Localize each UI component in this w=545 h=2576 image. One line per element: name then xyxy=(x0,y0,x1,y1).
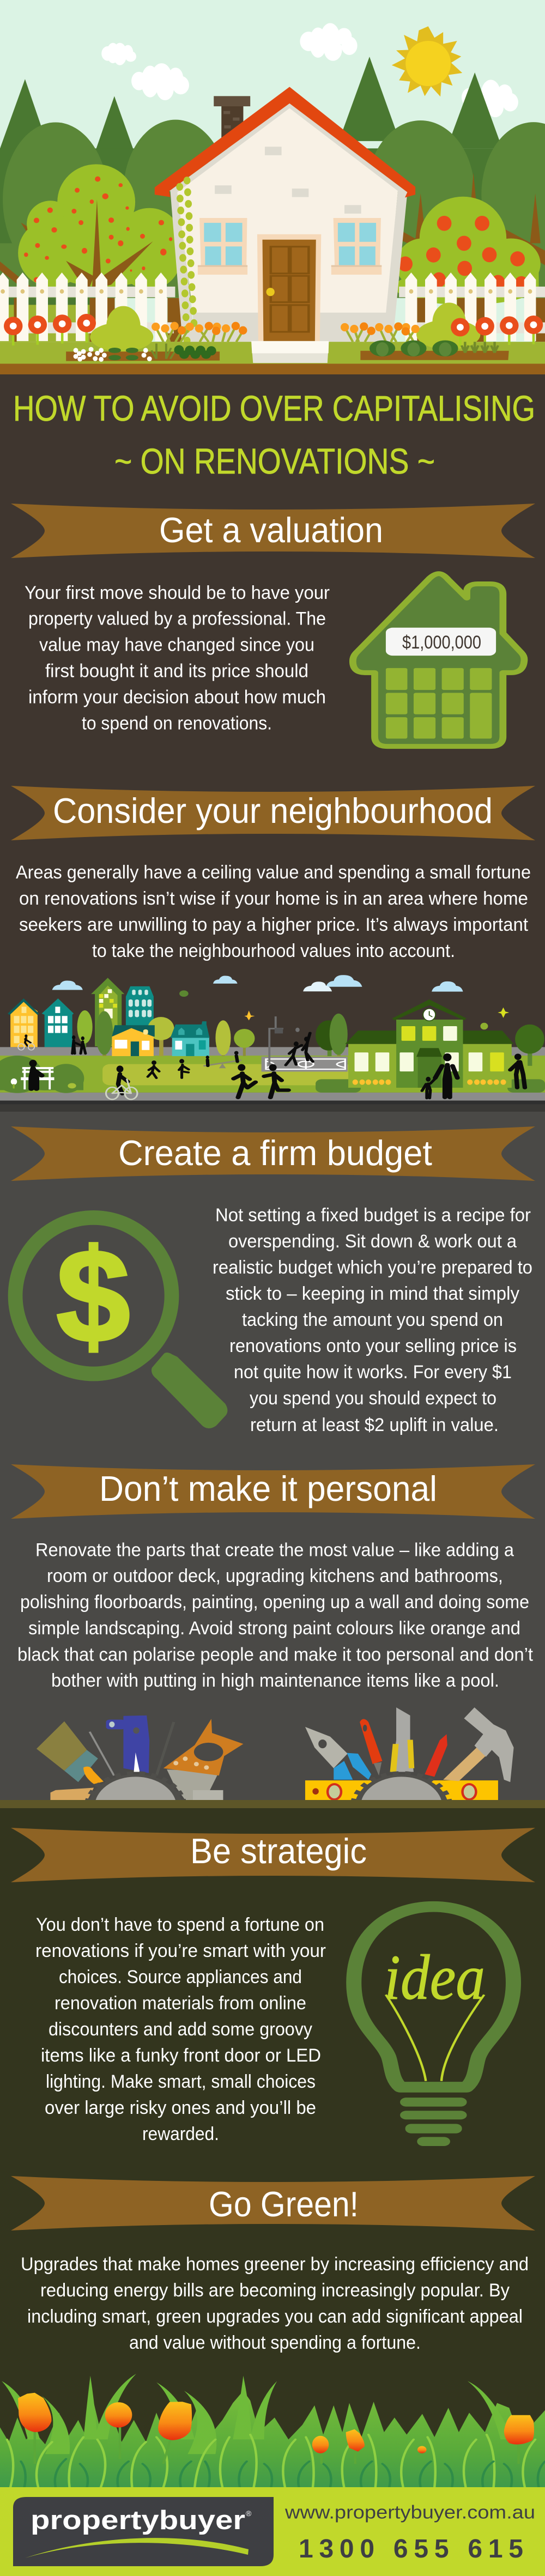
trees by school xyxy=(316,1014,544,1066)
lawn strip xyxy=(0,1056,545,1093)
panel: footer xyxy=(0,2487,545,2576)
text block: get a valuation: Your first move should be to have your xyxy=(25,583,330,603)
clouds xyxy=(52,975,463,992)
icon: green house with price tag: $1,000,000 xyxy=(402,632,481,653)
background pine trees xyxy=(0,57,545,298)
red screwdriver xyxy=(360,1719,383,1775)
park bench xyxy=(21,1067,54,1089)
banner: don't make it personal xyxy=(11,1464,535,1519)
street trees left xyxy=(77,1010,174,1056)
text block: be strategic: renovation materials from online xyxy=(55,1993,306,2014)
illustration: grass and tulips xyxy=(0,2374,545,2487)
circular saw blade xyxy=(89,1774,183,1840)
picket fence right xyxy=(399,272,545,341)
text block: don't make it personal: bother with putting in high maintenance items like a pool. xyxy=(51,1670,499,1691)
text block: be strategic: discounters and add some groovy xyxy=(49,2019,312,2040)
icon: clouds xyxy=(101,23,518,117)
icon: magnifying glass with dollar sign: $ xyxy=(56,1222,130,1370)
lawn xyxy=(0,342,545,364)
paint brush xyxy=(37,1722,104,1784)
banner: don't make it personal: Don’t make it personal xyxy=(99,1469,437,1508)
banner: go green: Go Green! xyxy=(209,2184,359,2224)
panel: get a valuation section xyxy=(0,374,545,1112)
yellow cottage xyxy=(112,1025,155,1056)
utility knife xyxy=(390,1707,414,1772)
text block: go green: reducing energy bills are becoming increasingly popular. By xyxy=(40,2280,510,2301)
basketball players xyxy=(286,1033,313,1065)
cyclist small xyxy=(18,1034,34,1050)
teal cottage xyxy=(171,1021,210,1056)
background round trees xyxy=(0,120,545,298)
text block: get a valuation xyxy=(25,583,330,734)
children running xyxy=(148,1059,189,1078)
banner: be strategic: Be strategic xyxy=(190,1831,367,1871)
green tower xyxy=(91,978,124,1046)
front door xyxy=(257,234,321,342)
gardener xyxy=(510,1053,525,1088)
grass mass xyxy=(0,2391,545,2487)
parent and child xyxy=(422,1053,457,1098)
banner: consider your neighbourhood xyxy=(11,786,535,840)
panel: create a firm budget and personal section xyxy=(0,1112,545,1840)
text block: consider your neighbourhood: on renovations isn’t wise if your home is in an area where home xyxy=(19,888,528,909)
screwdriver xyxy=(156,1722,174,1775)
hand saw xyxy=(164,1719,243,1801)
text block: create a firm budget: return at least $2 uplift in value. xyxy=(250,1415,499,1435)
text block: be strategic: You don’t have to spend a fortune on xyxy=(36,1914,324,1935)
runners xyxy=(234,1064,288,1098)
seesaw xyxy=(204,1051,240,1068)
couple walking xyxy=(72,1035,86,1053)
orange tulips xyxy=(152,322,420,342)
text block: don't make it personal: Renovate the parts that create the most value – like adding a xyxy=(35,1540,514,1561)
text block: be strategic: renovations if you’re smart with your xyxy=(35,1941,326,1961)
text block: create a firm budget: realistic budget which you’re prepared to xyxy=(213,1257,532,1278)
blue rivet tool xyxy=(106,1716,149,1773)
text block: go green: and value without spending a fortune. xyxy=(129,2332,421,2353)
red pencil xyxy=(425,1734,447,1777)
spirit level xyxy=(305,1780,498,1801)
text block: be strategic: choices. Source appliances and xyxy=(59,1967,302,1987)
circular saw blade xyxy=(355,1774,449,1840)
teal townhouse xyxy=(42,998,74,1047)
text block: create a firm budget: stick to – keeping in mind that simply xyxy=(226,1283,519,1304)
icon: idea light bulb: idea xyxy=(384,1942,485,2013)
banner: be strategic xyxy=(11,1828,535,1882)
panel: be strategic and go green section xyxy=(0,1800,545,2487)
climbing vine xyxy=(176,177,197,344)
text block: consider your neighbourhood xyxy=(16,862,531,961)
text block: create a firm budget: renovations onto your selling price is xyxy=(229,1336,517,1356)
tulips xyxy=(18,2393,534,2453)
icon: idea light bulb xyxy=(354,1907,513,2146)
icon: sun xyxy=(392,26,462,96)
text block: don't make it personal xyxy=(17,1540,534,1691)
text block: don't make it personal: simple landscaping. Avoid strong paint colours like orange and xyxy=(28,1618,520,1639)
text block: create a firm budget xyxy=(213,1205,532,1435)
banner: get a valuation: Get a valuation xyxy=(159,510,383,550)
text block: be strategic: rewarded. xyxy=(142,2124,219,2144)
illustration: neighbourhood street scene xyxy=(0,975,545,1112)
website: www.propertybuyer.com.au xyxy=(284,2502,535,2523)
school hedge xyxy=(316,1079,545,1093)
text block: consider your neighbourhood: seekers are unwilling to pay a higher price. It’s always important xyxy=(19,914,529,935)
front step xyxy=(251,341,329,363)
teal tower xyxy=(126,986,154,1026)
right window xyxy=(331,218,382,275)
text block: create a firm budget: Not setting a fixed budget is a recipe for xyxy=(215,1205,531,1226)
lighter blades xyxy=(7,2435,535,2487)
street trees middle xyxy=(215,1020,255,1056)
yellow townhouse xyxy=(8,998,39,1047)
text block: don't make it personal: polishing floorboards, painting, opening up a wall and doing some xyxy=(20,1592,529,1613)
school building xyxy=(345,999,514,1088)
banner: create a firm budget xyxy=(11,1126,535,1181)
bushes xyxy=(90,302,480,351)
text block: create a firm budget: not quite how it works. For every $1 xyxy=(234,1362,512,1383)
text block: be strategic: over large risky ones and you’ll be xyxy=(45,2098,316,2118)
text block: be strategic: items like a funky front door or LED xyxy=(41,2045,321,2066)
roof xyxy=(155,87,415,198)
wood mallet piece xyxy=(50,1787,94,1801)
steel square xyxy=(193,1790,223,1801)
area behind the fence xyxy=(0,298,545,342)
logo: propertybuyer xyxy=(13,2497,274,2566)
text block: get a valuation: property valued by a professional. The xyxy=(28,608,326,629)
silhouettes: people xyxy=(18,1033,525,1099)
red flowers xyxy=(4,314,543,347)
title: ~ ON RENOVATIONS ~ xyxy=(114,441,435,481)
text block: go green: including smart, green upgrades you can add significant appeal xyxy=(27,2306,523,2327)
banner: consider your neighbourhood: Consider your neighbourhood xyxy=(53,791,493,831)
text block: be strategic xyxy=(35,1914,326,2144)
seated person on bench xyxy=(29,1060,42,1089)
text block: get a valuation: value may have changed since you xyxy=(39,634,314,655)
hammer xyxy=(443,1707,514,1782)
vegetable bed left xyxy=(66,343,220,362)
illustration: right tool set xyxy=(305,1707,514,1840)
text block: get a valuation: to spend on renovations. xyxy=(82,713,272,734)
vegetable bed right xyxy=(360,341,509,360)
panel: hero house illustration xyxy=(0,0,545,381)
text block: go green: Upgrades that make homes greener by increasing efficiency and xyxy=(21,2254,529,2275)
house xyxy=(155,87,415,344)
text block: go green xyxy=(21,2254,529,2353)
left window xyxy=(198,218,247,275)
text block: get a valuation: inform your decision about how much xyxy=(28,687,326,707)
text block: get a valuation: first bought it and its price should xyxy=(45,660,308,681)
play area xyxy=(102,1064,353,1086)
park bushes xyxy=(0,1056,84,1093)
phone number: 1300 655 615 xyxy=(299,2535,523,2563)
banner: go green xyxy=(11,2176,535,2230)
darker blades xyxy=(21,2459,545,2487)
text block: be strategic: lighting. Make smart, small choices xyxy=(46,2071,316,2092)
illustration: left tool set xyxy=(37,1716,243,1840)
icon: magnifying glass with dollar sign xyxy=(8,1210,227,1428)
banner: create a firm budget: Create a firm budget xyxy=(118,1133,432,1173)
text block: consider your neighbourhood: to take the neighbourhood values into account. xyxy=(92,941,455,961)
logo: propertybuyer: ® xyxy=(246,2509,252,2518)
chimney xyxy=(214,96,250,138)
path soil xyxy=(0,363,545,375)
apple tree right xyxy=(395,173,545,342)
tulip stems xyxy=(35,2426,519,2464)
cyclist large xyxy=(106,1065,137,1099)
nail xyxy=(90,1732,114,1775)
apple tree left xyxy=(0,164,181,342)
pliers xyxy=(305,1727,371,1780)
text block: create a firm budget: you spend you should expect to xyxy=(250,1388,496,1409)
banner: get a valuation xyxy=(11,504,535,558)
icon: green house with price tag xyxy=(353,574,524,747)
text block: create a firm budget: tacking the amount you spend on xyxy=(242,1310,503,1330)
title xyxy=(13,388,535,481)
small flowers and birds xyxy=(11,990,509,1088)
text block: consider your neighbourhood: Areas generally have a ceiling value and spending a small fortune xyxy=(16,862,531,883)
text block: don't make it personal: room or outdoor deck, upgrading kitchens and bathrooms, xyxy=(47,1566,503,1586)
text block: don't make it personal: black that can polarise people and make it too personal and don’t xyxy=(17,1645,534,1665)
text block: create a firm budget: overspending. Sit down & work out a xyxy=(228,1231,517,1252)
picket fence left xyxy=(0,272,175,341)
wall bricks xyxy=(215,147,361,214)
road near xyxy=(0,1093,545,1112)
logo: propertybuyer: propertybuyer xyxy=(31,2506,245,2535)
basketball court xyxy=(262,1016,348,1072)
tall blades xyxy=(2,2374,513,2454)
road far xyxy=(0,1047,545,1056)
